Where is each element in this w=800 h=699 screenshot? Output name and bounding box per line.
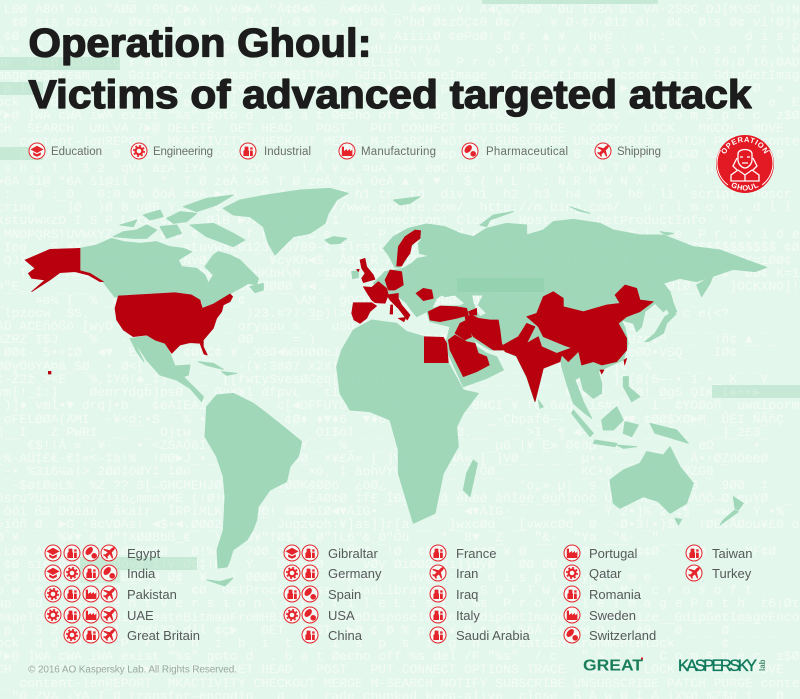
logo: Kaspersky Lab: KASPERSKY (678, 657, 757, 675)
legend: industry sectors: Engineering (153, 146, 213, 158)
logo: GReAT: GREAT (583, 658, 644, 674)
victims list: column 5: Taiwan (712, 546, 752, 561)
row: Egypt: Egypt (127, 546, 161, 561)
row: Egypt (45, 545, 161, 561)
victims list: column 3: Iran (456, 566, 478, 581)
victims list: column 4 (564, 545, 656, 643)
victims list: column 3: Italy (456, 608, 480, 623)
victims list: column 1 (45, 545, 200, 643)
copyright: © 2016 AO Kaspersky Lab. All Rights Reserved. (28, 664, 237, 676)
landmass: Eurasia, Africa and Oceania (337, 197, 767, 525)
legend: industry sectors: Education (51, 146, 102, 158)
badge: Operation Ghoul: OPERATION (722, 136, 769, 154)
row: Great Britain: Great Britain (127, 628, 200, 643)
victims list: column 5 (686, 545, 752, 581)
victims list: column 4: Romania (589, 587, 642, 602)
targeted countries: Europe, Africa and Asia (352, 230, 653, 402)
row: Pakistan (45, 586, 177, 602)
row: UAE (45, 607, 154, 623)
victims list: column 4: Switzerland (589, 628, 656, 643)
title: Victims of advanced targeted attack (28, 73, 752, 117)
row: China: China (328, 628, 363, 643)
legend: industry sectors: Manufacturing (361, 146, 436, 158)
victims list: column 4: Qatar (589, 566, 622, 581)
row: India (45, 565, 156, 581)
legend: industry sectors: Industrial (264, 146, 311, 158)
landmass: Americas and Greenland (80, 188, 348, 586)
row: India: India (127, 566, 156, 581)
victims list: column 5: Turkey (712, 566, 752, 581)
victims list: column 3 (430, 545, 530, 643)
row: Gibraltar: Gibraltar (328, 546, 379, 561)
title: Operation Ghoul: (28, 22, 372, 66)
victims list: column 3: Saudi Arabia (456, 628, 530, 643)
badge: Operation Ghoul: GHOUL (732, 182, 759, 190)
row: Spain: Spain (328, 587, 361, 602)
title (28, 22, 752, 117)
victims list: column 4: Sweden (589, 608, 636, 623)
victims list: column 4: Portugal (589, 546, 638, 561)
row: Pakistan: Pakistan (127, 587, 177, 602)
badge: Operation Ghoul (716, 135, 774, 193)
logo: Kaspersky Lab: lab (758, 659, 767, 671)
row: UAE: UAE (127, 608, 154, 623)
victims list: column 2 (284, 545, 382, 643)
legend: industry sectors: Shipping (617, 146, 661, 158)
victims list: column 3: France (456, 546, 496, 561)
row: USA: USA (328, 608, 355, 623)
legend: industry sectors: Pharmaceutical (486, 146, 568, 158)
row: Germany: Germany (328, 566, 382, 581)
targeted countries: North America (25, 248, 233, 374)
world map (25, 188, 767, 586)
row: Great Britain (64, 627, 200, 643)
victims list: column 3: Iraq (456, 587, 478, 602)
legend: industry sectors (29, 143, 661, 159)
